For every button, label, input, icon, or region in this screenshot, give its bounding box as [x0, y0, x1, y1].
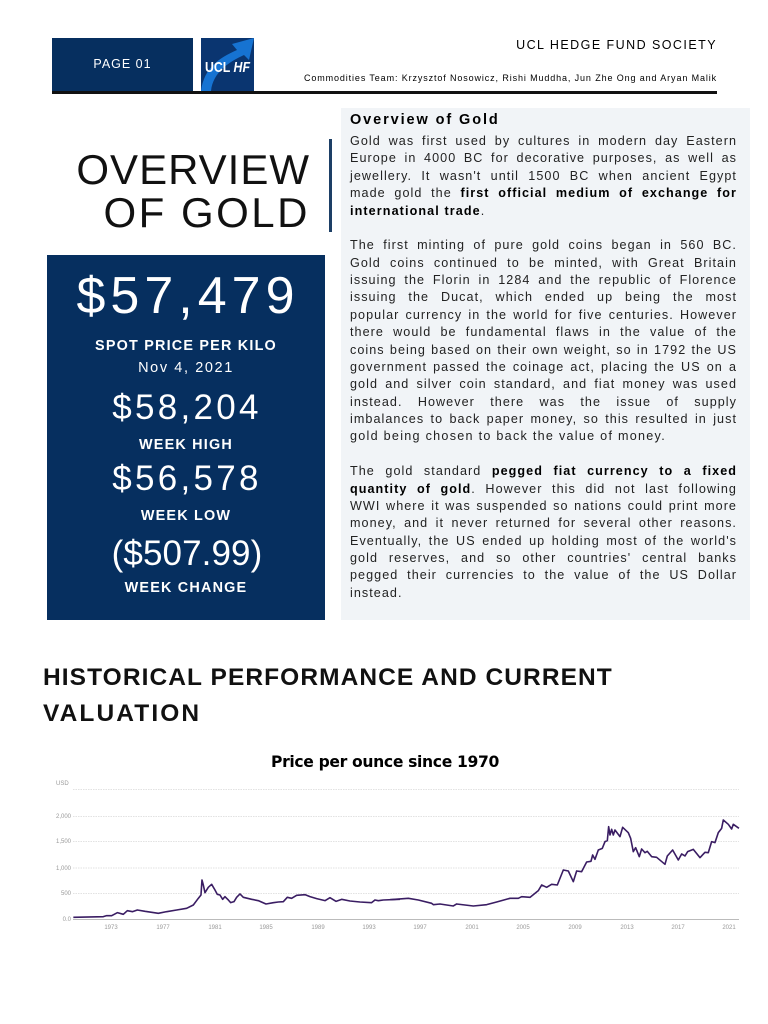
- panel: overview text background: [341, 108, 750, 620]
- overview heading: Overview of Gold: [350, 112, 500, 128]
- overview text: made gold the first official medium of exchange for: [350, 186, 737, 200]
- week low label: WEEK LOW: [141, 508, 231, 524]
- week high label: WEEK HIGH: [139, 437, 233, 453]
- line chart: gold price per ounce: 0.0: [63, 917, 72, 923]
- line chart: gold price per ounce: 2013: [620, 925, 634, 931]
- overview text: WWI where it was suspended so nations could print more: [350, 499, 737, 513]
- overview text: pegged their currencies to the value of the US Dollar: [350, 568, 737, 582]
- header rule: [52, 91, 717, 94]
- line chart: gold price per ounce: 1985: [259, 925, 273, 931]
- line chart: gold price per ounce: 2001: [465, 925, 479, 931]
- overview text: instead. However there was the issue of supply: [350, 395, 737, 409]
- week low value: $56,578: [112, 459, 262, 498]
- overview text: gold reserves, and so other countries' central banks: [350, 551, 737, 565]
- date: Nov 4, 2021: [138, 360, 234, 376]
- spot price label: SPOT PRICE PER KILO: [95, 338, 277, 354]
- overview text: The first minting of pure gold coins began in 560 BC.: [350, 238, 737, 252]
- panel: price stats: [47, 255, 325, 620]
- icon: UCL HF logo: [201, 38, 254, 91]
- title: [76, 146, 310, 236]
- title: OVERVIEW: [76, 146, 310, 193]
- header page tab: PAGE 01: [93, 57, 152, 71]
- overview text: coins being based on their own weight, so in 1792 the US: [350, 342, 737, 356]
- line chart: gold price per ounce: 1981: [208, 925, 222, 931]
- section heading: HISTORICAL PERFORMANCE AND CURRENT: [43, 664, 613, 691]
- team credits: Commodities Team: Krzysztof Nosowicz, Rishi Muddha, Jun Zhe Ong and Aryan Malik: [304, 73, 717, 83]
- line chart: gold price per ounce: 2017: [671, 925, 685, 931]
- overview text: money, and it never returned for several other reasons.: [350, 516, 737, 530]
- overview text: Europe in 4000 BC for decorative purposes, as well as: [350, 151, 737, 165]
- overview text: gold being chosen to back the value of money.: [350, 429, 666, 443]
- overview text: Eventually, the US ended up holding most of the world's: [350, 534, 737, 548]
- line chart: gold price per ounce: 1997: [413, 925, 427, 931]
- line chart: gold price per ounce: [56, 780, 740, 931]
- line chart: gold price per ounce: 2005: [516, 925, 530, 931]
- overview text: Gold was first used by cultures in modern day Eastern: [350, 134, 737, 148]
- line chart: gold price per ounce: 1993: [362, 925, 376, 931]
- society name: UCL HEDGE FUND SOCIETY: [516, 38, 717, 52]
- line chart: gold price per ounce: 2009: [568, 925, 582, 931]
- line chart: gold price per ounce: 2021: [722, 925, 736, 931]
- overview text: issuing the Ducat, which ended up being the most: [350, 290, 737, 304]
- overview text: issuing the Florin in 1284 and the republic of Florence: [350, 273, 737, 287]
- line chart: gold price per ounce: 1,000: [56, 866, 72, 872]
- title: OF GOLD: [103, 189, 310, 236]
- overview text: international trade.: [350, 204, 485, 218]
- section heading: [43, 664, 613, 727]
- week change label: WEEK CHANGE: [125, 580, 247, 596]
- overview text: gold and silver coin standard, and fiat money was used: [350, 377, 737, 391]
- overview text: The gold standard pegged fiat currency to a fixed: [350, 464, 737, 478]
- line chart: gold price per ounce: USD: [56, 781, 69, 787]
- overview text: [350, 134, 737, 600]
- week high value: $58,204: [112, 388, 262, 427]
- line chart: gold price per ounce: 2,000: [56, 814, 72, 820]
- overview text: government passed the coinage act, placing the US on a: [350, 360, 737, 374]
- overview text: jewellery. It wasn't until 1500 BC when ancient Egypt: [350, 169, 737, 183]
- line chart: gold price per ounce: 500: [61, 891, 72, 897]
- line chart: gold price per ounce: 1977: [156, 925, 170, 931]
- overview text: imbalances to back paper money, so this resulted in just: [350, 412, 737, 426]
- overview text: instead.: [350, 586, 403, 600]
- icon: UCL HF logo: UCL HF: [205, 59, 251, 76]
- line chart: gold price per ounce: 1973: [104, 925, 118, 931]
- overview text: popular currency in the world for five centuries. However: [350, 308, 737, 322]
- overview text: Gold coins continued to be minted, with Great Britain: [350, 256, 737, 270]
- header page tab: [52, 38, 193, 91]
- overview text: there would be fundamental flaws in the value of the: [350, 325, 737, 339]
- chart title: Price per ounce since 1970: [271, 753, 499, 771]
- section heading: VALUATION: [43, 700, 201, 727]
- line chart: gold price per ounce: 1989: [311, 925, 325, 931]
- title divider: [329, 139, 332, 232]
- spot price: $57,479: [77, 267, 299, 325]
- week change value: ($507.99): [112, 534, 262, 573]
- line chart: gold price per ounce: 1,500: [56, 839, 72, 845]
- overview text: quantity of gold. However this did not last following: [350, 482, 737, 496]
